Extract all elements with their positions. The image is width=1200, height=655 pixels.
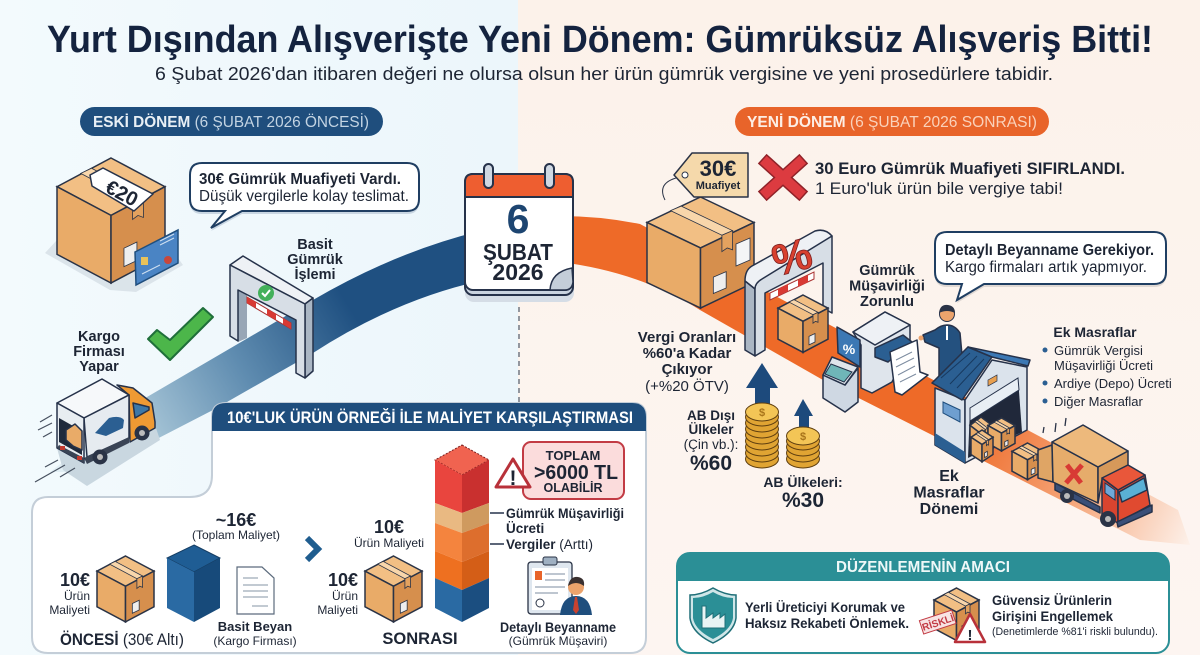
text: protect domestic producer xyxy=(745,599,909,631)
label: Gümrük Müşavirliği Zorunlu: Müşavirliği xyxy=(849,278,925,294)
text: protect domestic producer: Haksız Rekabeti Önlemek. xyxy=(745,615,909,631)
icon: factory shield xyxy=(690,588,736,643)
icon: warehouse xyxy=(932,347,1030,463)
label: Ek Masraflar Dönemi: Masraflar xyxy=(913,484,985,502)
icon: green check mark xyxy=(148,308,213,360)
callout: detailed declaration: Detaylı Beyanname Gerekiyor. xyxy=(945,242,1154,259)
before: total cost label: (Toplam Maliyet) xyxy=(192,528,280,542)
center dashed divider xyxy=(518,307,520,402)
purpose panel header xyxy=(677,553,1169,581)
label: Basit Gümrük İşlemi: Gümrük xyxy=(287,252,344,268)
orange road xyxy=(560,216,1190,545)
label: tax rates: (+%20 ÖTV) xyxy=(645,377,729,395)
list: additional expenses: Müşavirliği Ücreti xyxy=(1054,358,1153,373)
icon: calendar 6 February 2026 xyxy=(465,164,574,302)
list: additional expenses: Diğer Masraflar xyxy=(1054,394,1144,409)
label: Kargo Firması Yapar: Firması xyxy=(73,344,125,360)
after detailed declaration label: (Gümrük Müşaviri) xyxy=(509,634,607,648)
label: EU countries rate: %30 xyxy=(782,489,824,512)
callout: 30 euro exemption: 30€ Gümrük Muafiyeti Vardı. xyxy=(199,171,401,188)
after: product cost label: Maliyeti xyxy=(317,603,358,617)
icon: risky box with warning xyxy=(919,588,985,644)
callout: total cost over 6000 TL: OLABİLİR xyxy=(543,480,603,495)
callout: detailed declaration: Kargo firmaları artık yapmıyor. xyxy=(945,259,1147,276)
label: non-EU countries rate: AB Dışı xyxy=(687,408,735,423)
label: EU countries rate: AB Ülkeleri: xyxy=(763,474,843,490)
icon: simple customs gate xyxy=(230,256,313,378)
icon: red cross xyxy=(767,163,799,192)
subtitle: 6 Şubat 2026'dan itibaren değeri ne olursa olsun her ürün gümrük vergisine ve yeni prosedürlere tabidir. xyxy=(155,63,1053,84)
stack label: taxes: Vergiler (Arttı) xyxy=(506,537,593,552)
label: Ek Masraflar Dönemi: Ek xyxy=(939,468,959,485)
after detailed declaration label: Detaylı Beyanname xyxy=(500,620,616,635)
label: Gümrük Müşavirliği Zorunlu: Gümrük xyxy=(859,263,915,279)
text: prevent unsafe products: Girişini Engellemek xyxy=(992,608,1113,624)
purpose panel header: DÜZENLEMENİN AMACI xyxy=(836,559,1010,576)
background: right (new period) xyxy=(518,0,1200,655)
after: product cost label: 10€ xyxy=(328,570,358,590)
icon: box with 30 euro exemption tag xyxy=(647,153,754,308)
stack label: customs broker fee: Ücreti xyxy=(506,521,544,536)
before: product cost label: Maliyeti xyxy=(49,603,90,617)
after: warning triangle xyxy=(496,459,530,490)
callout: 30 euro exemption xyxy=(190,163,419,231)
icon: customs broker with scanner and kiosk xyxy=(823,305,962,412)
after: product cost upper label: Ürün Maliyeti xyxy=(354,536,424,550)
before: product cost label: Ürün xyxy=(64,589,90,603)
pill: old period: ESKİ DÖNEM (6 ŞUBAT 2026 ÖNCESİ) xyxy=(93,112,369,131)
label: non-EU countries rate: (Çin vb.): xyxy=(684,437,738,452)
before: blue cost block xyxy=(167,545,220,622)
arrow: small tax increase xyxy=(794,399,813,428)
label: tax rates: Vergi Oranları xyxy=(638,329,736,346)
text: exemption reset: 1 Euro'luk ürün bile vergiye tabi! xyxy=(815,180,1063,198)
label: tax rates xyxy=(638,329,736,395)
after heading: SONRASI xyxy=(382,630,458,648)
icon: delivery truck xyxy=(35,379,160,486)
after: product box xyxy=(365,556,422,622)
pill: new period: YENİ DÖNEM (6 ŞUBAT 2026 SONRASI) xyxy=(747,112,1037,131)
label: non-EU countries rate xyxy=(684,408,738,475)
label: non-EU countries rate: %60 xyxy=(690,452,732,475)
icon: small coin stack: $ xyxy=(800,431,806,443)
text: protect domestic producer: Yerli Üreticiyi Korumak ve xyxy=(745,599,905,615)
label: Gümrük Müşavirliği Zorunlu: Zorunlu xyxy=(860,294,914,310)
icon: box with 20 euro tag and credit card xyxy=(45,158,183,292)
list: additional expenses: Gümrük Vergisi xyxy=(1054,343,1143,358)
before: product cost label xyxy=(49,570,90,617)
panel header xyxy=(212,403,646,431)
text: prevent unsafe products xyxy=(992,592,1158,638)
icon: small coin stack xyxy=(786,427,820,468)
label: Basit Gümrük İşlemi: Basit xyxy=(297,237,333,253)
panel header: 10€'LUK ÜRÜN ÖRNEĞİ İLE MALİYET KARŞILAŞTIRMASI xyxy=(227,408,633,427)
label: Kargo Firması Yapar: Kargo xyxy=(78,329,120,345)
label: non-EU countries rate: Ülkeler xyxy=(688,422,734,437)
after: product cost label: Ürün xyxy=(332,589,358,603)
callout: total cost over 6000 TL: >6000 TL xyxy=(534,461,618,484)
callout: total cost over 6000 TL xyxy=(523,442,624,499)
before: total cost label: ~16€ xyxy=(216,510,256,530)
label: Ek Masraflar Dönemi: Dönemi xyxy=(920,501,978,518)
panel: purpose of regulation xyxy=(677,553,1169,653)
icon: calendar 6 February 2026: ŞUBAT xyxy=(483,239,553,265)
list: additional expenses: Ek Masraflar xyxy=(1053,324,1137,340)
icon: calendar 6 February 2026: 6 xyxy=(507,196,529,242)
pill: new period xyxy=(735,107,1049,136)
text: prevent unsafe products: Güvensiz Ürünlerin xyxy=(992,592,1112,608)
icon: customs gate with percent xyxy=(745,229,832,356)
icon: box with 30 euro exemption tag: Muafiyet xyxy=(696,180,741,192)
label: tax rates: %60'a Kadar xyxy=(643,345,731,362)
before: simple declaration label xyxy=(213,619,297,648)
after: product cost upper label xyxy=(354,517,424,550)
icon: big coin stack: $ xyxy=(759,407,765,419)
before: simple declaration label: (Kargo Firması) xyxy=(213,634,297,648)
icon: box with 20 euro tag and credit card: €20 xyxy=(102,176,141,211)
before: product cost label: 10€ xyxy=(60,570,90,590)
panel: 10 euro cost comparison xyxy=(32,403,646,653)
after: stacked cost column xyxy=(435,445,489,622)
label: Kargo Firması Yapar: Yapar xyxy=(79,359,119,375)
callout: 30 euro exemption: Düşük vergilerle kolay teslimat. xyxy=(199,188,409,205)
before: product box xyxy=(97,556,154,622)
arrow: before to after xyxy=(307,538,318,560)
icon: big coin stack xyxy=(746,403,778,468)
before heading: ÖNCESİ (30€ Altı) xyxy=(60,630,184,649)
before: simple declaration label: Basit Beyan xyxy=(218,619,292,634)
list: additional expenses: Ardiye (Depo) Ücreti xyxy=(1054,376,1172,391)
list: additional expenses xyxy=(1042,324,1172,409)
stack label: customs broker fee xyxy=(490,506,624,536)
icon: customs gate with percent: % xyxy=(767,229,817,286)
text: exemption reset xyxy=(815,160,1125,198)
text: prevent unsafe products: (Denetimlerde %81'i riskli bulundu). xyxy=(992,626,1158,638)
after: product cost label xyxy=(317,570,358,617)
before: total cost label xyxy=(192,510,280,542)
icon: cargo truck with cross xyxy=(1012,418,1152,527)
after: product cost upper label: 10€ xyxy=(374,517,404,537)
icon: risky box with warning: RİSKLİ xyxy=(920,611,956,634)
text: exemption reset: 30 Euro Gümrük Muafiyeti SIFIRLANDI. xyxy=(815,160,1125,178)
icon: box with 30 euro exemption tag: 30€ xyxy=(700,156,736,181)
label: Basit Gümrük İşlemi: İşlemi xyxy=(294,266,336,283)
icon: clipboard with customs broker xyxy=(528,557,592,615)
callout: total cost over 6000 TL: TOPLAM xyxy=(546,448,600,463)
blue road xyxy=(50,231,480,472)
pill: old period xyxy=(80,107,383,136)
title: Yurt Dışından Alışverişte Yeni Dönem: Gümrüksüz Alışveriş Bitti! xyxy=(47,19,1153,61)
after: warning triangle: ! xyxy=(510,467,516,490)
after detailed declaration label xyxy=(500,620,616,648)
background: left (old period) xyxy=(0,0,518,655)
before: simple declaration document xyxy=(237,567,274,614)
label: tax rates: Çıkıyor xyxy=(662,361,713,378)
icon: customs broker with scanner and kiosk: % xyxy=(843,341,856,357)
arrow: large tax increase xyxy=(746,363,778,405)
stack label: customs broker fee: Gümrük Müşavirliği xyxy=(506,506,624,521)
callout: detailed declaration xyxy=(935,232,1166,303)
icon: risky box with warning: ! xyxy=(968,627,972,644)
label: EU countries rate xyxy=(763,474,843,512)
icon: calendar 6 February 2026: 2026 xyxy=(492,259,544,285)
